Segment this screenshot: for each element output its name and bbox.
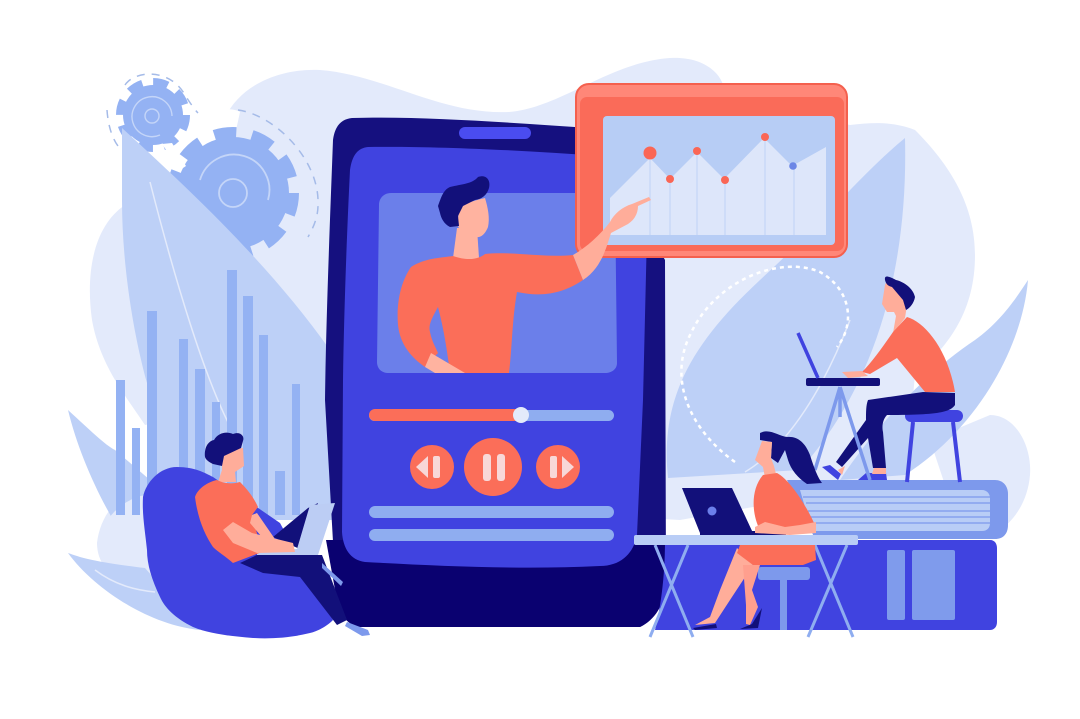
- gear decorations: [107, 73, 318, 253]
- trousers: [240, 555, 347, 625]
- tripod: [815, 387, 870, 480]
- woman at table: [634, 431, 858, 637]
- laptop lid: [798, 333, 818, 378]
- video panel: [377, 193, 617, 373]
- desk top: [806, 378, 880, 386]
- bar chart: [116, 270, 300, 515]
- monitor screen: [603, 116, 835, 245]
- text placeholder bars: [369, 506, 614, 541]
- arms: [755, 522, 816, 535]
- top book: [787, 480, 1008, 539]
- area chart: [610, 138, 826, 235]
- chart markers: [644, 133, 797, 184]
- bean bag: [143, 467, 333, 638]
- presenter shirt: [398, 253, 583, 373]
- dashed white arc: [681, 267, 848, 462]
- right leaves: [667, 138, 1028, 480]
- feet skin: [838, 466, 886, 475]
- phone screen: [342, 147, 648, 568]
- presenter neck: [453, 228, 479, 263]
- legs: [695, 548, 753, 625]
- hair: [885, 277, 915, 310]
- large left leaf: [122, 128, 332, 520]
- shirt: [195, 480, 262, 563]
- dashed gear outlines: [107, 74, 318, 237]
- table top: [634, 535, 858, 545]
- shoes: [322, 563, 370, 636]
- white cut-outs around gears: [120, 73, 240, 168]
- raised thigh: [273, 503, 318, 550]
- monitor: [576, 84, 847, 257]
- presenter: [398, 176, 583, 373]
- shoes: [693, 608, 762, 630]
- neck and face: [218, 448, 244, 482]
- upper dress: [754, 473, 815, 533]
- presenter hair: [438, 176, 489, 227]
- chart gridlines: [650, 138, 794, 235]
- man seated on stool: [822, 277, 963, 482]
- face and neck: [755, 441, 776, 478]
- rewind button: [410, 445, 454, 489]
- laptop: [257, 503, 335, 555]
- forward button: [536, 445, 580, 489]
- hair: [205, 433, 243, 466]
- standing desk with laptop: [798, 333, 880, 480]
- pause button: [464, 438, 522, 496]
- phone body: [325, 118, 666, 627]
- lower left leaves: [68, 410, 200, 630]
- stool: [758, 567, 810, 630]
- neck and face: [882, 278, 907, 333]
- background blobs: [90, 58, 1030, 590]
- laptop: [682, 488, 786, 535]
- stool: [905, 410, 963, 482]
- lower dress: [737, 545, 816, 565]
- small gear: [120, 82, 186, 148]
- player slider: [369, 407, 614, 423]
- shirt: [862, 317, 955, 392]
- man on bean bag: [143, 433, 370, 638]
- player buttons: [410, 438, 580, 496]
- table legs: [650, 545, 853, 637]
- hair and ponytail: [760, 431, 822, 484]
- bottom book: [655, 540, 997, 630]
- phone speaker: [459, 127, 531, 139]
- presenter face: [457, 198, 489, 237]
- shoes: [822, 465, 887, 480]
- arms: [223, 513, 295, 553]
- trousers: [836, 392, 955, 468]
- presenter lower hand: [425, 353, 465, 373]
- presenter forearm and pointing hand: [573, 197, 651, 280]
- white wedge over leaf edge: [162, 143, 186, 170]
- large gear: [173, 133, 293, 253]
- hand: [842, 371, 868, 378]
